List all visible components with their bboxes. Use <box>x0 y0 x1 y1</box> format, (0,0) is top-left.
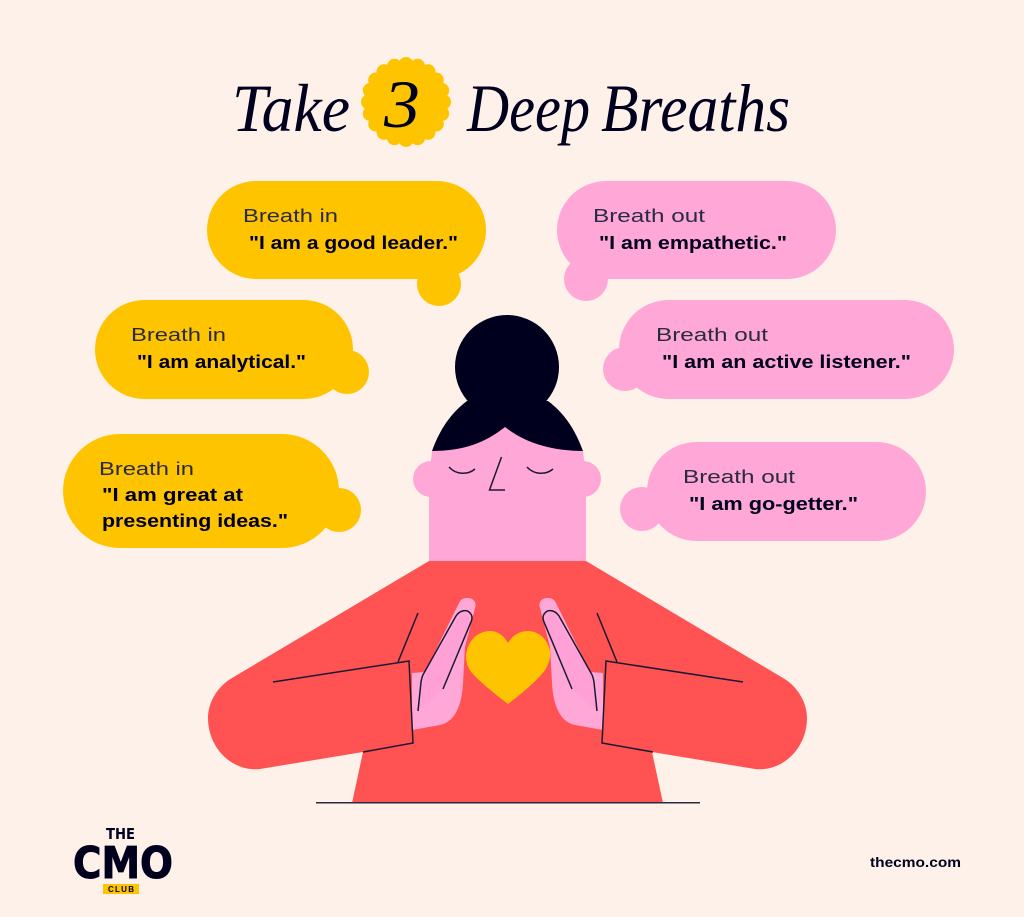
website url: thecmo.com <box>870 854 961 870</box>
title numeral: 3: 3 <box>383 66 420 142</box>
baseline <box>316 802 700 804</box>
speech bubble: I am go-getter: "I am go-getter." <box>689 494 858 514</box>
logo: The CMO Club <box>73 825 173 894</box>
icon: scalloped yellow badge <box>361 57 451 147</box>
speech bubble: I am an active listener: "I am an active listener." <box>662 352 911 372</box>
speech bubble: I am go-getter <box>620 442 926 541</box>
person illustration <box>208 315 807 804</box>
speech bubble: I am a good leader: "I am a good leader." <box>249 233 458 253</box>
speech bubble: I am great at presenting ideas: presenting ideas." <box>102 511 288 531</box>
speech bubble: I am great at presenting ideas: "I am great at <box>102 485 243 505</box>
speech bubble: I am empathetic: "I am empathetic." <box>599 233 787 253</box>
speech bubble: I am analytical: "I am analytical." <box>137 352 306 372</box>
speech bubble: I am empathetic: Breath out <box>593 206 705 226</box>
logo: The CMO Club: THE <box>106 825 135 843</box>
right cuff <box>597 613 743 752</box>
left cuff <box>273 613 418 752</box>
speech bubble: I am go-getter: Breath out <box>683 467 795 487</box>
speech bubble: I am great at presenting ideas <box>63 434 361 548</box>
hair bun <box>455 315 559 419</box>
speech bubble: I am analytical: Breath in <box>131 325 226 345</box>
logo: The CMO Club: CLUB <box>108 885 134 894</box>
title word: Breaths: Breaths <box>601 70 790 146</box>
speech bubble: I am an active listener: Breath out <box>656 325 768 345</box>
neck and face <box>429 400 586 561</box>
left hand <box>412 598 476 730</box>
shirt and arms <box>208 561 807 803</box>
speech bubble: I am a good leader: Breath in <box>243 206 338 226</box>
speech bubble: I am analytical <box>95 300 369 399</box>
speech bubble: I am great at presenting ideas: Breath in <box>99 459 194 479</box>
speech bubble: I am empathetic <box>557 181 836 301</box>
title word: Deep: Deep <box>466 70 590 146</box>
hair <box>432 401 583 451</box>
speech bubble: I am a good leader <box>207 181 486 306</box>
closed eyes and nose <box>449 457 553 490</box>
right hand <box>539 598 603 730</box>
speech bubble: I am an active listener <box>603 300 954 399</box>
icon: heart <box>466 631 550 704</box>
ears <box>413 461 601 497</box>
logo: The CMO Club: CMO <box>73 838 173 889</box>
title word: Take: Take <box>232 70 350 146</box>
title <box>232 57 790 147</box>
